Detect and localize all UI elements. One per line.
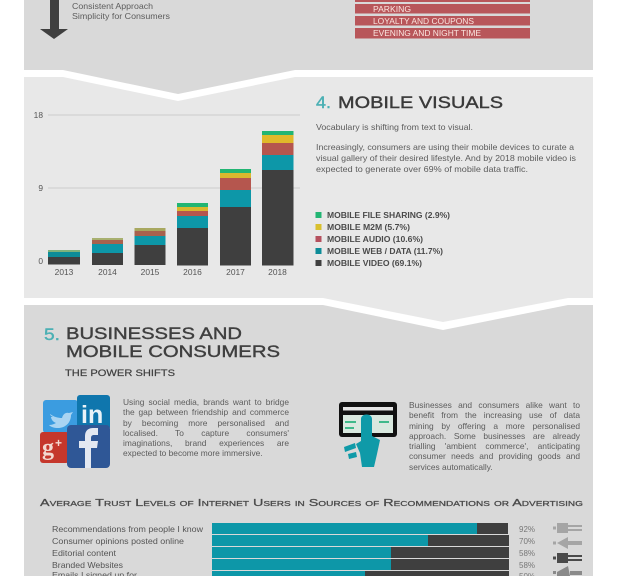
icon: hand tapping payment card	[339, 402, 397, 467]
list: red location rows: LOYALTY AND COUPONS	[373, 17, 475, 26]
subheading: the power shifts: THE POWER SHIFTS	[65, 368, 175, 379]
chart: trust levels by source	[52, 523, 535, 576]
axis: years: 2013	[55, 267, 74, 277]
row: consumer opinions: 70%	[519, 537, 535, 546]
icon: google plus: g	[42, 435, 54, 461]
heading: 5. businesses and mobile consumers: BUSINESSES AND	[66, 324, 242, 343]
panel: businesses and mobile consumers	[24, 305, 593, 576]
icon: linkedin: in	[81, 401, 103, 429]
text: data mining paragraph: trialling 'ambient commerce', anticipating	[409, 441, 580, 451]
text: social media paragraph	[123, 397, 289, 458]
axis: years: 2016	[183, 267, 202, 277]
legend: traffic types: MOBILE VIDEO (69.1%)	[327, 259, 422, 268]
icon: google plus: +	[55, 436, 62, 450]
text: vocabulary intro: Increasingly, consumers are using their mobile devices to curate a	[316, 142, 574, 152]
row: recommendations from people: 92%	[519, 525, 535, 534]
text: data mining paragraph	[409, 400, 580, 472]
icon: facebook	[67, 425, 110, 468]
row: recommendations from people	[52, 523, 535, 534]
bar: 2015	[134, 228, 166, 265]
list: red location rows: EVENING AND NIGHT TIME	[373, 29, 482, 38]
icon: google plus	[40, 432, 69, 463]
chart: stacked bars of mobile data traffic: 18	[34, 110, 43, 120]
heading: 4. mobile visuals: 4.	[316, 93, 331, 112]
axis: years: 2018	[268, 267, 287, 277]
text: data mining paragraph: approach. Some businesses are already	[409, 431, 580, 441]
text: vocabulary intro: Vocabulary is shifting from text to visual.	[316, 122, 473, 132]
text: social media paragraph: Using social media, brands want to bridge	[123, 397, 289, 407]
text: vocabulary intro: visual gallery of their desired lifestyle. And by 2018 mobile video is	[316, 153, 576, 163]
row: consumer opinions	[52, 535, 535, 546]
row: editorial content: 58%	[519, 549, 535, 558]
text: social media paragraph: imaginations, brand experiences are	[123, 438, 289, 448]
chart: stacked bars of mobile data traffic: 0	[38, 256, 43, 266]
bar: 2014	[92, 238, 123, 265]
row: emails signed up for	[52, 570, 535, 576]
legend: traffic types: MOBILE WEB / DATA (11.7%)	[327, 247, 443, 256]
list: red location rows: PARKING	[373, 5, 411, 14]
text: data mining paragraph: benefit from the increasing use of data	[409, 410, 580, 420]
panel: mobile visuals	[24, 77, 593, 322]
heading: 5. businesses and mobile consumers	[44, 324, 280, 361]
row: editorial content: Editorial content	[52, 548, 117, 558]
axis: years	[55, 267, 287, 277]
axis: years: 2015	[141, 267, 160, 277]
text: social media paragraph: expected to become more immersive.	[123, 448, 263, 458]
heading: trust levels: Average Trust Levels of Internet Users in Sources of Recommendations or Advertising	[40, 498, 583, 509]
text: social media paragraph: the gap between friendship and commerce	[123, 407, 289, 417]
text: consistent approach: Consistent Approach	[72, 1, 153, 11]
icons: trust hand pictograms	[553, 523, 582, 576]
legend: traffic types: MOBILE FILE SHARING (2.9%)	[327, 211, 450, 220]
text: data mining paragraph: services automatically.	[409, 462, 493, 472]
icon: social media tiles	[40, 395, 110, 468]
heading: 5. businesses and mobile consumers: 5.	[44, 325, 60, 344]
arrow: downward	[40, 0, 68, 39]
text: vocabulary intro: expected to generate over 69% of mobile data traffic.	[316, 164, 528, 174]
bar: 2013	[48, 250, 80, 264]
row: branded websites	[52, 559, 535, 570]
text: vocabulary intro	[316, 122, 576, 174]
bar: 2016	[177, 203, 208, 266]
axis: years: 2014	[98, 267, 117, 277]
text: data mining paragraph: consumer needs and providing goods and	[409, 451, 580, 461]
axis: years: 2017	[226, 267, 245, 277]
row: consumer opinions: Consumer opinions posted online	[52, 536, 184, 546]
text: social media paragraph: by becoming more personalised and	[123, 418, 289, 428]
row: editorial content	[52, 547, 535, 558]
chart: stacked bars of mobile data traffic: 9	[38, 183, 43, 193]
legend: traffic types: MOBILE AUDIO (10.6%)	[327, 235, 423, 244]
icon: twitter	[43, 400, 78, 433]
legend: traffic types	[316, 211, 450, 268]
list: red location rows	[355, 0, 530, 38]
text: consistent approach	[72, 1, 170, 21]
row: recommendations from people: Recommendations from people I know	[52, 524, 204, 534]
heading: 5. businesses and mobile consumers: MOBILE CONSUMERS	[66, 342, 280, 361]
row: branded websites: Branded Websites	[52, 560, 123, 570]
text: data mining paragraph: Businesses and consumers alike want to	[409, 400, 580, 410]
bar: 2017	[220, 169, 251, 266]
chart: stacked bars of mobile data traffic	[34, 110, 300, 277]
text: consistent approach: Simplicity for Consumers	[72, 11, 170, 21]
legend: traffic types: MOBILE M2M (5.7%)	[327, 223, 410, 232]
panel: top section	[24, 0, 593, 94]
row: branded websites: 58%	[519, 561, 535, 570]
text: social media paragraph: localised. To capture consumers'	[123, 428, 289, 438]
text: data mining paragraph: mining by offering a more personalised	[409, 421, 580, 431]
heading: 4. mobile visuals: MOBILE VISUALS	[338, 93, 503, 112]
bar: 2018	[262, 131, 294, 266]
